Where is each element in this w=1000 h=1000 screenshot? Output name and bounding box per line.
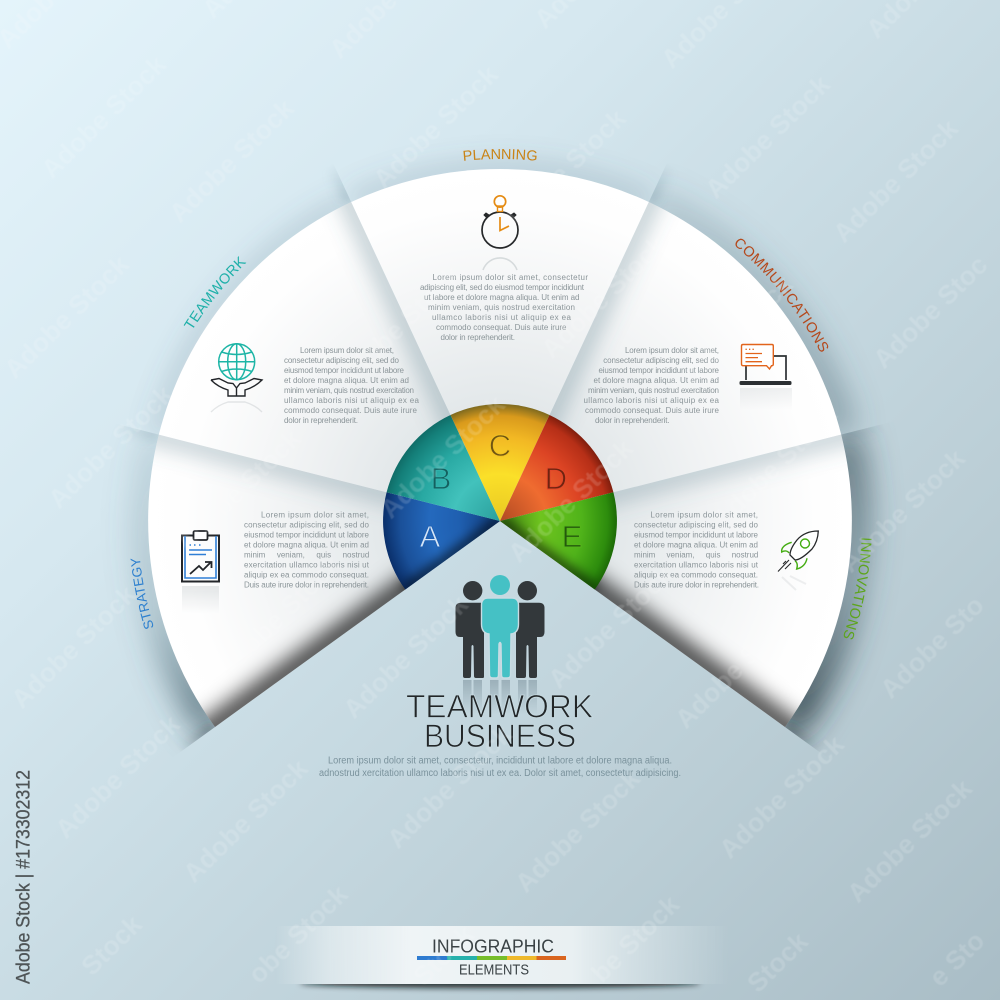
text: planning: Lorem ipsum dolor sit amet, consectetur	[432, 273, 588, 282]
text: innovations: minim veniam, quis nostrud	[634, 550, 758, 560]
text: planning	[420, 273, 588, 342]
text: innovations	[634, 510, 759, 590]
label: teamwork: TEAMWORK	[184, 256, 246, 328]
text: teamwork: Lorem ipsum dolor sit amet,	[300, 346, 394, 355]
watermark: Stock	[407, 919, 480, 991]
watermark: obe Stock	[242, 879, 354, 989]
text: teamwork: et dolore magna aliqua. Ut enim ad	[284, 376, 409, 385]
text: planning: adipiscing elit, sed do eiusmod tempor incididunt	[420, 283, 585, 292]
text: communications	[584, 346, 720, 425]
watermark: Adobe Stock	[0, 249, 135, 384]
watermark: Adobe Stock	[330, 259, 467, 394]
text: teamwork: eiusmod tempor incididunt ut labore	[284, 366, 405, 375]
slice E: E	[562, 519, 582, 554]
text: teamwork: dolor in reprehenderit.	[284, 416, 358, 425]
text: communications: ullamco laboris nisi ut aliquip ex ea	[584, 396, 720, 405]
text: innovations: aliquip ex ea commodo consequat.	[634, 570, 758, 580]
watermark: Adobe Stock	[367, 59, 504, 194]
slice E	[500, 492, 617, 590]
watermark: Stock	[741, 926, 814, 998]
icon: team of three people	[456, 575, 544, 714]
banner: infographic elements	[275, 926, 730, 988]
watermark: Adobe Stock	[669, 599, 806, 734]
icon: globe in hands	[211, 344, 262, 412]
watermark: Adobe Stock	[495, 103, 632, 238]
text: planning: ut labore et dolore magna aliqua. Ut enim ad	[424, 293, 580, 302]
slice D: D	[545, 461, 567, 496]
text: teamwork: consectetur adipiscing elit, sed do	[284, 356, 400, 365]
slice B	[387, 415, 500, 521]
banner: infographic elements: ELEMENTS	[459, 962, 529, 978]
text: innovations: Duis aute irure dolor in reprehenderit.	[634, 580, 759, 590]
text: strategy	[244, 510, 370, 590]
label: strategy: STRATEGY	[130, 558, 154, 629]
watermark: Stock	[75, 909, 148, 981]
watermark: Adobe Stock	[509, 763, 646, 898]
panel: teamwork	[158, 202, 450, 492]
text: strategy: Lorem ipsum dolor sit amet,	[261, 510, 369, 520]
watermark: Adobe Stock	[177, 753, 314, 888]
watermark: Adobe Stock	[662, 269, 799, 404]
watermark: Adobe Stock	[699, 69, 836, 204]
label: innovations: INNOVATIONS	[844, 538, 872, 640]
watermark: Adobe Stock	[170, 423, 307, 558]
text: teamwork	[284, 346, 420, 425]
watermark: Adobe Stoc	[867, 250, 993, 374]
text: strategy: eiusmod tempor incididunt ut labore	[244, 530, 370, 540]
text: planning: minim veniam, quis nostrud exercitation	[428, 303, 575, 312]
watermark: Adobe Stock	[542, 559, 679, 694]
text: innovations: et dolore magna aliqua. Ut enim ad	[634, 540, 758, 550]
watermark: be Stock	[585, 889, 685, 988]
watermark: Adobe Stock	[49, 709, 186, 844]
panel: innovations	[500, 434, 852, 727]
text: innovations: eiusmod tempor incididunt ut labore	[634, 530, 759, 540]
watermark: Adobe Stock	[713, 729, 850, 864]
text: innovations: Lorem ipsum dolor sit amet,	[650, 510, 758, 520]
watermark: Adobe Stock	[5, 579, 142, 714]
text: communications: eiusmod tempor incididunt ut labore	[598, 366, 720, 375]
text: communications: consectetur adipiscing elit, sed do	[603, 356, 720, 365]
pie: lettered centre wheel	[383, 404, 617, 590]
text: teamwork: ullamco laboris nisi ut aliquip ex ea	[284, 396, 420, 405]
slice A: A	[420, 519, 441, 554]
text: strategy: consectetur adipiscing elit, sed do	[244, 520, 370, 530]
slice A	[383, 492, 500, 590]
watermark: Adobe Stock	[827, 113, 964, 248]
watermark: Adobe Stock	[381, 719, 518, 854]
subtitle text	[319, 756, 681, 779]
icon: stopwatch	[482, 196, 518, 270]
text: planning: dolor in reprehenderit.	[440, 333, 515, 342]
subtitle text: adnostrud xercitation ullamco laboris nisi ut ex ea. Dolor sit amet, consectetur adipisicing.	[319, 768, 681, 779]
text: communications: Lorem ipsum dolor sit amet,	[625, 346, 719, 355]
boundary shadow streaks beyond the arc	[129, 172, 872, 749]
text: communications: minim veniam, quis nostrud exercitation	[588, 386, 719, 395]
icon: clipboard	[182, 531, 219, 614]
watermark: e Sto	[923, 925, 990, 992]
label: communications: COMMUNICATIONS	[736, 238, 828, 352]
text: communications: et dolore magna aliqua. Ut enim ad	[594, 376, 719, 385]
watermark: Adobe Stock	[834, 443, 971, 578]
text: planning: commodo consequat. Duis aute irure	[436, 323, 567, 332]
panel: planning	[351, 169, 649, 521]
watermark: Adobe Stock	[841, 773, 978, 908]
title: BUSINESS	[424, 718, 576, 754]
label: planning: PLANNING	[463, 149, 537, 161]
arc shadows around the wheel	[148, 169, 852, 727]
text: strategy: aliquip ex ea commodo consequat.	[244, 570, 369, 580]
slice D	[500, 415, 613, 521]
watermark: Adobe Stock	[502, 433, 639, 568]
icon: rocket	[778, 531, 818, 590]
text: strategy: et dolore magna aliqua. Ut enim ad	[244, 540, 369, 550]
slice C	[450, 404, 550, 521]
stock id side text: Adobe Stock | #173302312	[12, 770, 34, 984]
watermark: Adobe Stock	[163, 93, 300, 228]
text: communications: dolor in reprehenderit.	[595, 416, 670, 425]
title	[406, 688, 593, 754]
watermark: Adobe Stock	[535, 229, 672, 364]
colour bar	[417, 956, 566, 960]
title: TEAMWORK	[406, 688, 593, 724]
watermark: Adobe Stock	[374, 389, 511, 524]
watermark: Adobe Stock	[42, 379, 179, 514]
watermark: Adobe Stock	[706, 399, 843, 534]
watermark: Adobe Sto	[874, 590, 990, 704]
slice C: C	[489, 428, 511, 463]
subtitle text: Lorem ipsum dolor sit amet, consectetur, incididunt ut labore et dolore magna aliqua.	[328, 756, 672, 766]
watermark: Adobe Stock	[337, 589, 474, 724]
text: innovations: consectetur adipiscing elit, sed do	[634, 520, 759, 530]
text: strategy: Duis aute irure dolor in reprehenderit.	[244, 580, 369, 590]
text: teamwork: minim veniam, quis nostrud exercitation	[284, 386, 414, 395]
panel: communications	[550, 202, 842, 492]
text: innovations: exercitation ullamco laboris nisi ut	[634, 560, 759, 570]
watermark: Adobe Stock	[203, 219, 340, 354]
panel: strategy	[148, 434, 500, 727]
text: teamwork: commodo consequat. Duis aute irure	[284, 406, 418, 415]
text: strategy: minim veniam, quis nostrud	[244, 550, 369, 560]
text: planning: ullamco laboris nisi ut aliquip ex ea	[432, 313, 572, 322]
watermark: Adobe Stock	[35, 49, 172, 184]
text: strategy: exercitation ullamco laboris nisi ut	[244, 560, 370, 570]
text: communications: commodo consequat. Duis aute irure	[585, 406, 720, 415]
slice B: B	[431, 461, 451, 496]
banner: infographic elements: INFOGRAPHIC	[432, 936, 554, 956]
icon: laptop with chat bubble	[740, 344, 792, 410]
watermark: Adobe Stock	[210, 549, 347, 684]
